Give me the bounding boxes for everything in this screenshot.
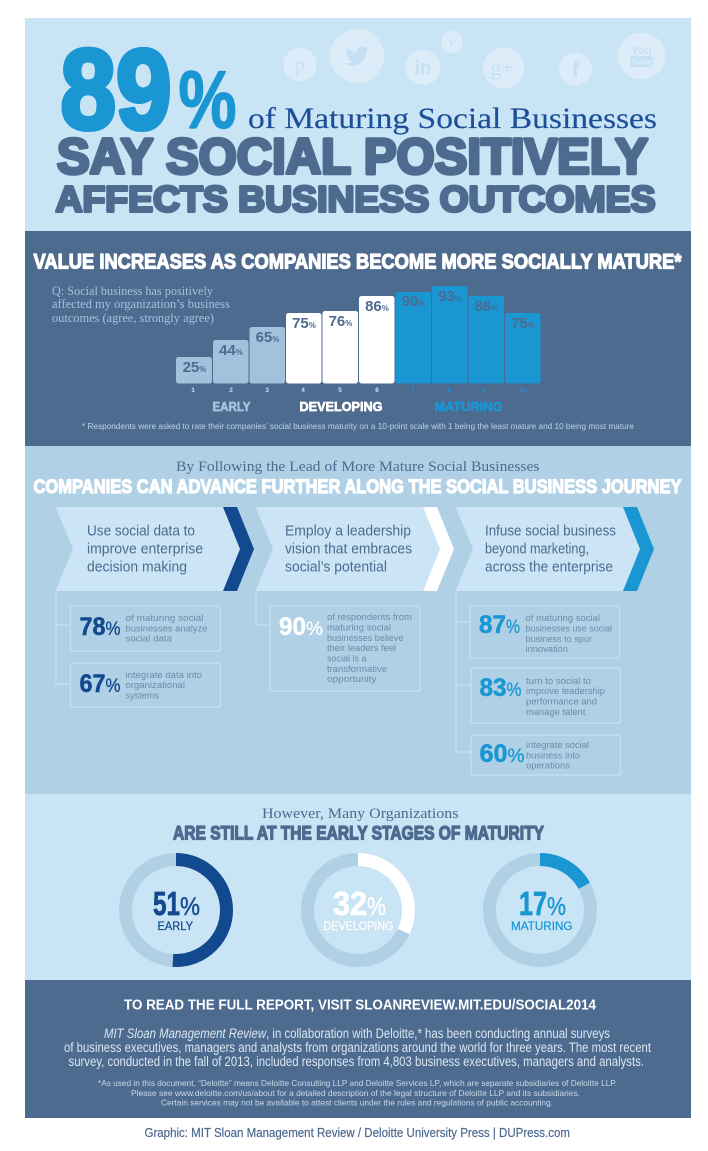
legal note xyxy=(98,1078,617,1108)
scale numbers: 9 xyxy=(482,387,486,394)
donut: 51% early xyxy=(126,860,226,960)
chevron 3: across the enterprise xyxy=(485,560,613,576)
stat 83%: turn to social to xyxy=(526,676,591,687)
scale numbers: 6 xyxy=(375,387,379,394)
chevron 2: Employ a leadership xyxy=(285,524,411,540)
stat 60%: integrate social xyxy=(526,740,589,751)
scale numbers xyxy=(191,387,527,394)
column 2: leadership vision xyxy=(256,507,454,691)
icon: youtube: Tube xyxy=(631,57,652,67)
stat 78%: businesses analyze xyxy=(126,624,208,634)
donut: 32% developing: 32 xyxy=(333,885,367,922)
stat 60%: operations xyxy=(526,760,570,772)
icon: youtube: You xyxy=(632,45,651,57)
chevron 2: vision that embraces xyxy=(285,542,412,558)
scale numbers: 3 xyxy=(265,387,269,394)
scale numbers: 1 xyxy=(191,387,195,394)
heading: ARE STILL AT THE EARLY STAGES OF MATURITY xyxy=(173,824,544,844)
bars: early xyxy=(176,327,285,384)
bar values: 90% xyxy=(402,293,425,310)
bar values: 86% xyxy=(365,298,389,315)
column 3: infuse social business xyxy=(456,507,654,775)
stat 87% xyxy=(470,606,620,658)
panel: early stages of maturity xyxy=(25,794,691,980)
stat 78%: social data xyxy=(126,634,173,644)
donut: 17% maturing: MATURING xyxy=(511,921,573,933)
stat 60%: business into xyxy=(526,750,580,762)
icon: pinterest: p xyxy=(295,54,305,76)
stat 60%: 60 xyxy=(480,740,508,768)
stat 67%: % xyxy=(106,676,121,697)
stat 90% xyxy=(270,606,420,691)
stat 90%: their leaders feel xyxy=(327,643,396,654)
bar values: 86% xyxy=(475,298,498,315)
chevron 2 xyxy=(256,507,454,591)
icon: pinterest xyxy=(284,48,316,81)
donut: 32% developing: % xyxy=(367,893,386,921)
category labels: MATURING xyxy=(434,399,502,414)
stat 87%: businesses use social xyxy=(526,624,612,634)
question text: affected my organization’s business xyxy=(52,297,230,311)
connector lines xyxy=(256,591,270,625)
stat 60% xyxy=(471,735,620,775)
chevron 3: Infuse social business xyxy=(485,524,616,540)
stat 90%: maturing social xyxy=(327,622,391,634)
bars: developing xyxy=(286,296,394,384)
stat 67%: organizational xyxy=(126,680,185,691)
stat 87%: 87 xyxy=(479,611,506,639)
subtitle: of Maturing Social Businesses xyxy=(248,102,657,135)
stat 60%: % xyxy=(508,746,525,767)
headline line 1: SAY SOCIAL POSITIVELY xyxy=(57,128,648,184)
stat 67% xyxy=(70,663,220,707)
chevron 1: improve enterprise xyxy=(87,542,203,558)
bar values xyxy=(183,288,535,376)
icon: linkedin: in xyxy=(415,58,431,79)
subheading: By Following the Lead of More Mature Social Businesses xyxy=(176,459,540,475)
legal note: Please see www.deloitte.com/us/about for a detailed description of the legal structure of Deloitte LLP and its subsidiaries. xyxy=(131,1088,580,1098)
stat 90%: % xyxy=(306,619,323,640)
stat 90%: social is a xyxy=(327,654,367,664)
stat 78%: 78 xyxy=(80,613,106,641)
footnote: * Respondents were asked to rate their companies’ social business maturity on a 10-point scale with 1 being the least mature and 10 being most mature xyxy=(82,421,634,431)
legal note: Certain services may not be available to attest clients under the rules and regulations of public accounting. xyxy=(161,1098,553,1108)
survey description: MIT Sloan Management Review, in collaboration with Deloitte,* has been conducting annual surveys xyxy=(104,1026,610,1041)
stat 90%: transformative xyxy=(327,664,387,675)
panel: hero header xyxy=(25,18,691,231)
icon: google plus xyxy=(483,48,524,88)
question text: outcomes (agree, strongly agree) xyxy=(52,311,214,325)
category labels xyxy=(212,399,502,414)
stat 78%: % xyxy=(106,619,121,640)
stat 90%: 90 xyxy=(279,613,306,641)
panel: social business journey xyxy=(25,446,691,794)
scale numbers: 10 xyxy=(519,387,527,394)
chevron 3 xyxy=(456,507,654,591)
chevron 2: social’s potential xyxy=(285,560,387,576)
chevron 1: decision making xyxy=(87,560,187,576)
donut: 17% maturing xyxy=(490,860,590,960)
donut: 32% developing: DEVELOPING xyxy=(324,921,394,933)
stat 87%: of maturing social xyxy=(526,613,600,624)
legal note: *As used in this document, “Deloitte” means Deloitte Consulting LLP and Deloitte Services LP, which are separate subsidiaries of Deloitte LLP. xyxy=(98,1078,617,1088)
bar values: 25% xyxy=(183,359,206,376)
bar values: 75% xyxy=(511,315,535,332)
column 1: decision making xyxy=(56,507,254,707)
stat 90%: opportunity xyxy=(327,674,377,685)
donut: 32% developing xyxy=(308,860,408,960)
category labels: EARLY xyxy=(212,399,251,414)
icon: vimeo xyxy=(441,31,463,53)
stat 67%: 67 xyxy=(80,670,106,698)
icons: social media circles xyxy=(284,29,665,88)
report link heading: TO READ THE FULL REPORT, VISIT SLOANREVIEW.MIT.EDU/SOCIAL2014 xyxy=(124,998,596,1014)
bar values: 76% xyxy=(329,313,352,330)
stat 78% xyxy=(70,606,220,651)
stat 78%: of maturing social xyxy=(126,613,204,624)
connector lines xyxy=(56,591,70,684)
icon: facebook: f xyxy=(572,57,580,82)
headline line 2: AFFECTS BUSINESS OUTCOMES xyxy=(56,178,656,220)
icon: linkedin xyxy=(406,50,440,85)
chevron 1 xyxy=(56,507,254,591)
icon: facebook xyxy=(559,52,592,86)
scale numbers: 8 xyxy=(447,387,451,394)
icon: twitter xyxy=(330,29,384,83)
bar values: 75% xyxy=(292,315,316,332)
donut: 51% early: EARLY xyxy=(158,921,193,933)
bar values: 93% xyxy=(438,288,462,305)
stat 83%: manage talent xyxy=(526,707,586,718)
scale numbers: 2 xyxy=(229,387,233,394)
stat 67%: integrate data into xyxy=(126,670,202,681)
panel: value increases xyxy=(25,231,691,446)
title: 89%: 89 xyxy=(60,26,172,152)
stat 87%: business to spur xyxy=(526,634,593,645)
bars: maturing xyxy=(396,286,540,384)
bar chart xyxy=(176,286,540,394)
title: 89%: % xyxy=(178,55,236,146)
stat 67%: systems xyxy=(126,690,159,702)
bar values: 65% xyxy=(256,329,279,346)
icon: google plus: g+ xyxy=(490,55,514,80)
stat 87%: % xyxy=(506,617,520,638)
donut: 51% early: 51 xyxy=(153,885,180,922)
subheading: However, Many Organizations xyxy=(262,806,459,822)
stat 90%: businesses believe xyxy=(327,633,404,644)
stat 83%: 83 xyxy=(480,674,506,702)
stat 90%: of respondents from xyxy=(327,612,412,623)
chevron 1: Use social data to xyxy=(87,524,195,540)
category labels: DEVELOPING xyxy=(300,399,382,414)
scale numbers: 5 xyxy=(338,387,342,394)
question text: Q: Social business has positively xyxy=(52,284,214,298)
panel: full report xyxy=(25,980,691,1118)
stat 83% xyxy=(471,668,620,723)
icon: youtube xyxy=(618,32,665,80)
survey description xyxy=(64,1026,651,1069)
question text xyxy=(52,284,230,325)
icon: vimeo: v xyxy=(449,34,455,49)
footer credit: Graphic: MIT Sloan Management Review / Deloitte University Press | DUPress.com xyxy=(144,1126,570,1140)
stat 83%: improve leadership xyxy=(526,686,605,697)
scale numbers: 4 xyxy=(301,387,305,394)
donut: 51% early: % xyxy=(180,893,200,921)
stat 87%: innovation xyxy=(526,644,568,655)
scale numbers: 7 xyxy=(411,387,415,394)
connector lines xyxy=(456,591,471,752)
stat 83%: performance and xyxy=(526,696,597,708)
chevron 3: beyond marketing, xyxy=(485,542,589,558)
bar values: 44% xyxy=(219,342,243,359)
stat 83%: % xyxy=(506,680,522,701)
donut: 17% maturing: % xyxy=(547,893,566,921)
donut: 17% maturing: 17 xyxy=(519,885,547,922)
